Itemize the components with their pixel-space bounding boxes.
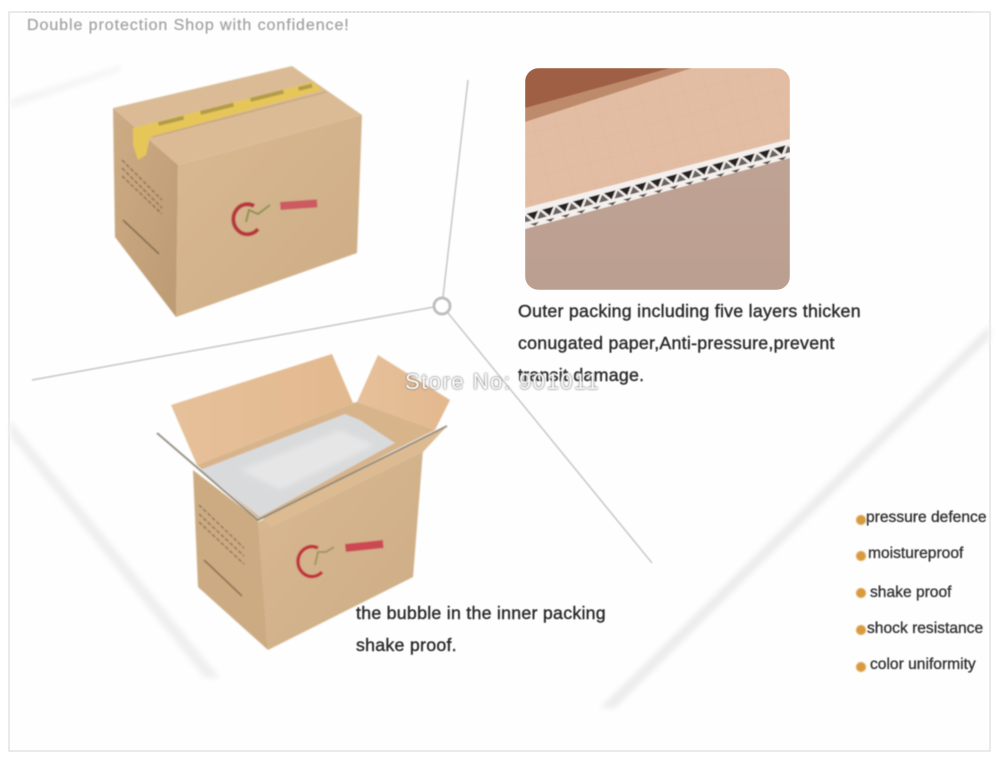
feature: pressure defence: pressure defence xyxy=(866,509,986,526)
connector lines and ring xyxy=(32,80,652,563)
side print marks xyxy=(199,505,244,596)
closed cardboard box xyxy=(113,66,362,317)
outer packing text: conugated paper,Anti-pressure,prevent xyxy=(518,333,835,353)
feature: moistureproof: moistureproof xyxy=(868,545,963,562)
box interior xyxy=(197,402,435,520)
corrugated cardboard photo xyxy=(525,68,790,290)
inner packing text: the bubble in the inner packing xyxy=(356,603,606,623)
back flap xyxy=(171,354,353,465)
side print marks xyxy=(122,160,162,254)
logo on closed box xyxy=(233,199,317,234)
packing tape xyxy=(133,82,322,160)
open cardboard box xyxy=(157,354,450,650)
outer packing text: Outer packing including five layers thicken xyxy=(518,301,861,321)
watermark: Store No: 901011 xyxy=(405,369,600,394)
inner packing text xyxy=(355,603,606,656)
feature: color uniformity: color uniformity xyxy=(870,656,976,673)
logo on open box xyxy=(298,540,384,577)
feature: shock resistance: shock resistance xyxy=(867,620,983,637)
front xyxy=(258,450,423,650)
heading: Double protection Shop with confidence! xyxy=(27,17,350,34)
feature: shake proof: shake proof xyxy=(870,584,952,601)
outer packing text xyxy=(517,301,861,386)
inner packing text: shake proof. xyxy=(356,635,457,655)
bubble wrap xyxy=(200,414,395,517)
outer packing text: transit damage. xyxy=(518,365,644,385)
left side xyxy=(193,470,268,650)
feature list xyxy=(855,509,987,674)
right flap xyxy=(357,355,450,430)
